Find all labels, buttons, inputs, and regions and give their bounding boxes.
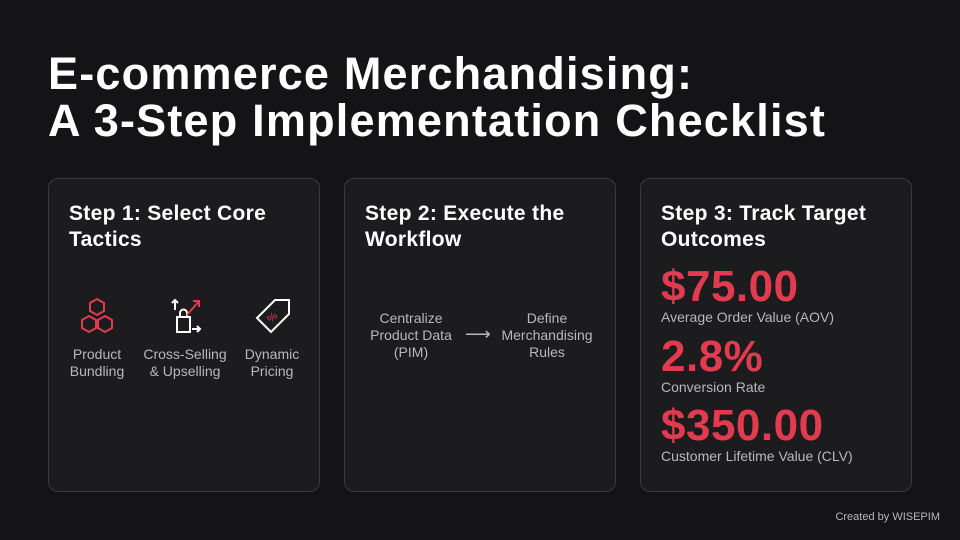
metric: AOV: [661, 262, 834, 325]
workflow step: define rules: Merchandising: [501, 327, 593, 343]
tactic: cross-selling: [143, 298, 227, 379]
panel: step 1: Step 1: Select Core: [69, 202, 266, 225]
panel: step 2: [344, 178, 616, 492]
arrow: ⟶: [465, 324, 491, 344]
metric: AOV: $75.00: [661, 262, 799, 311]
metric: CLV: [661, 401, 853, 464]
metric: CLV: Customer Lifetime Value (CLV): [661, 448, 853, 464]
tactic: product bundling: Product: [73, 346, 121, 362]
workflow step: centralize: Product Data: [370, 327, 452, 343]
panel: step 3: [640, 178, 912, 492]
icon: cubes: [81, 298, 113, 334]
tactic: dynamic pricing: [245, 299, 299, 379]
tactic: dynamic pricing: Dynamic: [245, 346, 299, 362]
workflow step: define rules: [501, 310, 593, 360]
icon: price tag: [256, 299, 290, 334]
panel: step 1: [48, 178, 320, 492]
workflow step: define rules: Rules: [529, 344, 565, 360]
workflow step: centralize: Centralize: [379, 310, 443, 326]
title: A 3-Step Implementation Checklist: [48, 95, 826, 146]
title: [48, 48, 826, 146]
metric: conversion: 2.8%: [661, 332, 763, 381]
panel: step 3: Outcomes: [661, 228, 766, 251]
metric: CLV: $350.00: [661, 401, 824, 450]
tactic: cross-selling: & Upselling: [150, 363, 220, 379]
panel: step 2: Workflow: [365, 228, 462, 251]
title: E-commerce Merchandising:: [48, 48, 693, 99]
footer credit: Created by WISEPIM: [835, 511, 940, 523]
workflow step: define rules: Define: [527, 310, 567, 326]
panel: step 1: Tactics: [69, 228, 142, 251]
metric: AOV: Average Order Value (AOV): [661, 309, 834, 325]
panel: step 3: Step 3: Track Target: [661, 202, 866, 225]
workflow step: centralize: [370, 310, 452, 360]
tactic: product bundling: [70, 298, 124, 379]
tactic: dynamic pricing: Pricing: [251, 363, 293, 379]
tactic: cross-selling: Cross-Selling: [143, 346, 227, 362]
metric: conversion: Conversion Rate: [661, 379, 765, 395]
workflow step: centralize: (PIM): [394, 344, 428, 360]
icon: price tag: %: [265, 310, 280, 325]
icon: bag arrows: [171, 298, 202, 333]
panel: step 2: Step 2: Execute the: [365, 202, 564, 225]
tactic: product bundling: Bundling: [70, 363, 124, 379]
